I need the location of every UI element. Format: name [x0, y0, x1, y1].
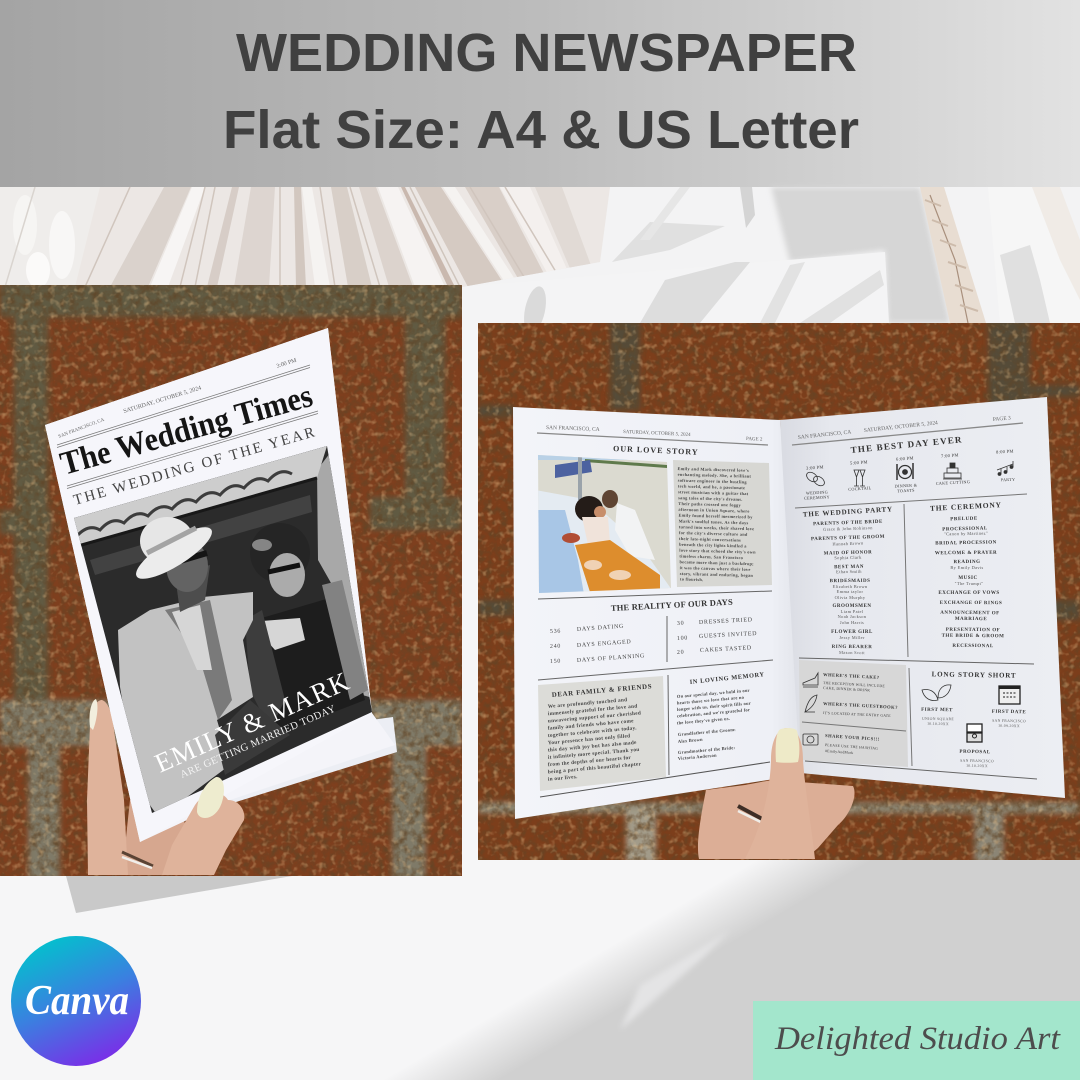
ceremony list: EXCHANGE OF RINGS — [940, 601, 1002, 606]
left hand fingers behind cover — [87, 699, 200, 875]
man — [118, 592, 253, 815]
statistics: 30 — [677, 621, 685, 627]
statistics: 150 — [550, 659, 561, 665]
love story text box: their late-night conversations — [679, 536, 741, 543]
page 2 — [513, 407, 800, 819]
ceremony list: WELCOME & PRAYER — [935, 551, 997, 556]
sheet of paper behind right photo — [462, 252, 889, 330]
wedding party list: THE WEDDING PARTY — [803, 505, 893, 519]
love story text box: beneath the city lights kindled a — [679, 542, 747, 549]
wedding party list: John Harris — [840, 620, 864, 625]
statistics — [550, 617, 757, 665]
timeline labels: DINNER & — [895, 482, 918, 489]
ceremony list: THE CEREMONY — [930, 500, 1002, 513]
masthead info: SAN FRANCISCO, CA — [58, 418, 106, 440]
panel: dear family and friends: in our lives. — [548, 774, 578, 783]
statistics: 240 — [550, 644, 561, 650]
icon: camera — [803, 734, 818, 745]
wedding party list: Noah Jackson — [838, 614, 867, 619]
panel: where's the cake: WHERE'S THE CAKE? — [823, 672, 880, 680]
icon: ring box — [967, 724, 982, 742]
panel: long story short: 10.10.20XX — [966, 764, 988, 768]
panel: where's the cake — [799, 660, 908, 767]
panel: long story short — [921, 670, 1026, 768]
panel: long story short: 10.10.20XX — [927, 722, 949, 726]
right hand thumb — [745, 728, 815, 859]
love story text box: sang tales of the city's dreams. — [678, 495, 743, 502]
foliage — [920, 187, 986, 323]
timeline labels: CAKE CUTTING — [936, 479, 970, 486]
panel: dear family and friends: from the depths of our hearts for — [548, 755, 632, 768]
page 2 masthead: SATURDAY, OCTOBER 5, 2024 — [623, 430, 691, 438]
icon: dinner plate — [897, 463, 913, 480]
icon: wedding rings — [805, 470, 826, 488]
heading: our love story: OUR LOVE STORY — [613, 444, 699, 457]
timeline labels: TOASTS — [897, 488, 915, 493]
icon: birds — [922, 685, 951, 701]
woman — [264, 600, 365, 731]
masthead title: The Wedding Times — [56, 378, 317, 483]
statistics: DAYS OF PLANNING — [577, 653, 645, 664]
love story text box: to flourish. — [680, 577, 704, 582]
newspaper front cover: 3:00 PM — [276, 358, 298, 370]
timeline labels — [804, 477, 1015, 501]
right hand behind pages — [698, 780, 855, 859]
wedding party list: Olivia Murphy — [835, 595, 866, 600]
love story text box: Emily found herself mesmerized by — [678, 513, 753, 520]
wedding party list: Mason Scott — [839, 650, 865, 655]
ceremony list: ANNOUNCEMENT OF — [940, 611, 1000, 616]
open newspaper — [513, 397, 1065, 819]
panel: where's the cake: WHERE'S THE GUESTBOOK? — [823, 701, 898, 710]
panel: long story short: FIRST DATE — [992, 710, 1026, 715]
newspaper front cover: SATURDAY, OCTOBER 5, 2024 — [123, 385, 202, 415]
shadow under left photo — [66, 876, 292, 913]
panel: where's the cake: SHARE YOUR PICS!!! — [825, 733, 880, 742]
in loving memory: Victoria Anderson — [678, 753, 717, 761]
statistics: DAYS ENGAGED — [577, 639, 632, 649]
wedding party list: Liam Patel — [841, 609, 864, 614]
ceremony list: "The Trumpt" — [955, 581, 983, 586]
Canva logo: Canva — [25, 978, 129, 1024]
statistics: 20 — [677, 650, 685, 656]
panel: long story short: SAN FRANCISCO — [992, 719, 1026, 723]
wedding party list: MAID OF HONOR — [824, 550, 872, 557]
page 3 masthead — [792, 415, 1023, 445]
panel: where's the cake: CAKE, DINNER & DRINK — [823, 686, 870, 693]
timeline times: 3:00 PM — [806, 464, 824, 471]
in loving memory: On our special day, we hold in our — [677, 688, 750, 699]
panel: dear family and friends — [538, 676, 666, 791]
statistics: CAKES TASTED — [700, 645, 752, 654]
icon: music notes — [997, 461, 1013, 476]
couple names: EMILY & MARK — [150, 666, 354, 778]
icon: calendar — [999, 686, 1020, 704]
ceremony list: RECESSIONAL — [952, 644, 994, 649]
back sheet — [223, 717, 397, 806]
wedding party list: BRIDESMAIDS — [830, 579, 870, 584]
love story text box: software engineer in the bustling — [678, 478, 747, 485]
in loving memory: IN LOVING MEMORY — [689, 671, 765, 686]
in loving memory: Grandfather of the Groom: — [678, 727, 736, 737]
statistics: GUESTS INVITED — [699, 631, 757, 640]
wedding party list: Grace & John Robinson — [823, 525, 873, 532]
love story text box: story, vibrant and enduring, began — [680, 571, 753, 578]
timeline times: 6:00 PM — [896, 455, 914, 462]
cover sheet — [45, 328, 395, 842]
in loving memory — [677, 671, 765, 761]
ceremony list: By Emily Davis — [950, 565, 984, 570]
wedding party list: Ethan Smith — [836, 569, 862, 574]
love story text box: street musician with a guitar that — [678, 489, 749, 496]
panel: where's the cake: PLEASE USE THE HASHTAG — [825, 743, 878, 751]
wedding party list: Emma taylor — [837, 589, 864, 594]
in loving memory: celebration, and we're grateful for — [677, 707, 750, 718]
timeline labels: WEDDING — [806, 489, 828, 496]
tagline: ARE GETTING MARRIED TODAY — [179, 704, 338, 781]
timeline times — [806, 449, 1014, 471]
wedding party list: FLOWER GIRL — [831, 630, 873, 635]
wedding party list: Hannah Brown — [832, 540, 864, 547]
love story text box: became more than just a backdrop; — [679, 559, 754, 566]
subtitle: THE WEDDING OF THE YEAR — [72, 425, 316, 509]
love story text box: Their paths crossed one foggy — [678, 501, 742, 508]
ceremony list: READING — [953, 560, 981, 565]
timeline times: 7:00 PM — [941, 452, 959, 459]
in loving memory: longer with us, their spirit fills our — [677, 701, 751, 712]
page 3 masthead: SATURDAY, OCTOBER 5, 2024 — [864, 420, 938, 434]
love story text box: afternoon in Union Square, where — [678, 507, 750, 514]
wedding party list: GROOMSMEN — [833, 604, 871, 609]
love story text box: turned into weeks, their shared love — [679, 524, 754, 531]
wedding party list — [803, 505, 893, 655]
panel: dear family and friends: DEAR FAMILY & FRIENDS — [552, 683, 653, 699]
photo: brick wall right — [478, 320, 1080, 863]
ceremony list: PROCESSIONAL — [942, 526, 988, 533]
boat photo — [538, 455, 671, 593]
wedding party list: PARENTS OF THE GROOM — [811, 535, 885, 542]
love story text box: enchanting melody. She, a brilliant — [678, 472, 752, 479]
panel: long story short: 10.09.20XX — [998, 724, 1020, 728]
wedding party list: Sophia Clark — [834, 555, 862, 560]
love story text box: Mark's soulful tunes. As the days — [679, 519, 749, 525]
ceremony list: EXCHANGE OF VOWS — [938, 591, 1000, 596]
studio badge — [753, 1001, 1080, 1080]
panel: where's the cake: #EmilyAndMark — [825, 749, 854, 755]
timeline times: 5:00 PM — [850, 459, 868, 466]
statistics: 100 — [677, 635, 688, 642]
wedding party list: Elizabeth Brown — [833, 584, 868, 589]
wedding party list: BEST MAN — [834, 565, 864, 570]
timeline labels: CEREMONY — [804, 494, 830, 501]
panel: long story short: FIRST MET — [921, 708, 953, 713]
heading: the best day ever: THE BEST DAY EVER — [850, 434, 963, 455]
panel: dear family and friends: together to celebrate with us today. — [548, 725, 637, 739]
title — [223, 23, 859, 160]
statistics: DRESSES TRIED — [699, 617, 753, 626]
panel: dear family and friends: We are profoundly touched and — [548, 697, 628, 710]
ceremony list: THE BRIDE & GROOM — [942, 634, 1004, 639]
left hand thumb — [122, 777, 244, 875]
ceremony list: PRELUDE — [950, 517, 978, 522]
photo: brick wall left — [0, 283, 462, 880]
love story text box: it was the canvas where their love — [680, 565, 751, 572]
ceremony list: MARRIAGE — [955, 617, 987, 622]
ceremony list: "Canon by Martinez" — [944, 531, 988, 536]
timeline labels: PARTY — [1001, 477, 1015, 482]
heading: the reality of our days: THE REALITY OF OUR DAYS — [611, 597, 733, 613]
love story text box: Emily and Mark discovered love's — [677, 466, 749, 473]
page 3 — [780, 397, 1065, 798]
ceremony list: MUSIC — [958, 576, 978, 581]
icon: cake slice — [803, 673, 818, 687]
timeline times: 8:00 PM — [996, 449, 1014, 454]
panel: long story short: SAN FRANCISCO — [960, 759, 994, 763]
page 3 masthead: SAN FRANCISCO, CA — [798, 429, 852, 441]
page 2 masthead: PAGE 2 — [746, 437, 763, 443]
in loving memory: hearts those we love that are no — [677, 695, 745, 705]
in loving memory: the love they've given us. — [677, 716, 730, 725]
panel: where's the cake: IT'S LOCATED AT THE ENTRY GATE — [823, 711, 891, 718]
panel: dear family and friends: unwavering support of our cherished — [548, 710, 641, 724]
panel: where's the cake: THE RECEPTION WILL INCLUDE — [823, 681, 885, 688]
cover photo of couple — [74, 446, 372, 813]
panel: long story short: PROPOSAL — [959, 750, 991, 755]
ceremony list — [930, 500, 1004, 649]
icon: cocktail glasses — [854, 470, 865, 486]
panel: dear family and friends: Your presence has not only filled — [548, 733, 631, 746]
in loving memory: Grandmother of the Bride: — [678, 745, 736, 755]
panel: dear family and friends: it infinitely more special. Thank you — [548, 747, 640, 761]
wedding party list: RING BEARER — [832, 645, 872, 650]
panel: long story short: LONG STORY SHORT — [932, 670, 1016, 680]
statistics: 536 — [550, 629, 561, 635]
panel: dear family and friends: this day with joy but has also made — [548, 740, 637, 754]
love story text box — [673, 460, 772, 587]
wedding party list: PARENTS OF THE BRIDE — [813, 520, 883, 527]
ceremony list: BRIDAL PROCESSION — [935, 540, 997, 547]
ceremony list: PRESENTATION OF — [946, 628, 1000, 633]
love story text box: timeless charm. San Francisco — [679, 554, 743, 560]
panel: dear family and friends: immensely grateful for the love and — [548, 703, 638, 717]
page 2 masthead: SAN FRANCISCO, CA — [546, 425, 600, 433]
love story text box: love story that echoed the city's own — [679, 548, 756, 555]
panel: dear family and friends: being a part of this beautiful chapter — [548, 761, 642, 775]
icon: wedding cake — [943, 463, 962, 479]
header banner — [0, 0, 1080, 187]
icon: quill — [805, 695, 817, 712]
panel: dear family and friends: family and friends who have come — [548, 718, 634, 732]
Canva logo — [11, 936, 141, 1066]
love story text box: for the city's diverse culture and — [679, 530, 748, 537]
in loving memory: Alex Brown — [678, 737, 703, 744]
timeline labels: COCKTAIL — [848, 485, 872, 492]
studio badge: Delighted Studio Art — [774, 1021, 1061, 1057]
decorative photo strip: pleated fan and wall shadows — [0, 187, 1080, 336]
title: WEDDING NEWSPAPER — [236, 23, 857, 83]
title: Flat Size: A4 & US Letter — [223, 100, 859, 160]
panel: long story short: UNION SQUARE — [922, 717, 954, 721]
newspaper front cover — [45, 328, 397, 842]
page 2 masthead — [537, 425, 768, 445]
page 3 masthead: PAGE 3 — [993, 415, 1011, 423]
statistics: DAYS DATING — [577, 624, 624, 633]
love story text box: tech world, and he, a passionate — [678, 484, 745, 490]
wedding party list: Jessy Miller — [839, 635, 865, 640]
